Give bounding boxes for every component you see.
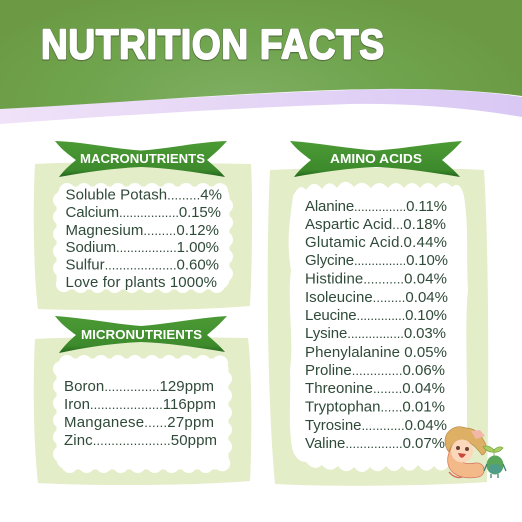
micronutrients list: Iron....................116ppm [64,396,216,413]
micronutrients card background [34,337,251,485]
amino acids list: Isoleucine.........0.04% [305,289,448,306]
micronutrients scalloped white area [61,363,224,465]
amino acids list: Alanine...............0.11% [305,198,447,215]
macronutrients list: Sulfur....................0.60% [66,256,219,274]
panel: macronutrients [34,141,252,310]
amino acids list: Glycine...............0.10% [305,252,448,269]
icon: seedling mascot [483,446,506,478]
panel: micronutrients [34,316,251,485]
amino acids list: Phenylalanine 0.05% [305,344,447,361]
micronutrients heading: MICRONUTRIENTS [81,327,202,342]
micronutrients list: Boron...............129ppm [64,378,214,395]
micronutrients ribbon [55,316,227,353]
amino acids white area [289,182,468,472]
panel: amino acids [268,141,488,486]
amino acids list: Tryptophan......0.01% [305,398,445,416]
macronutrients list: Sodium.................1.00% [66,239,219,256]
amino acids ribbon [290,141,462,177]
amino acids list: Leucine..............0.10% [305,307,447,324]
macronutrients list: Love for plants 1000% [66,274,217,291]
macronutrients ribbon [55,141,227,177]
icon: worm mascot with hat [445,427,486,477]
micronutrients list: Manganese......27ppm [64,414,214,431]
amino acids list: Threonine........0.04% [305,380,445,397]
amino acids list: Histidine...........0.04% [305,270,447,288]
amino acids heading: AMINO ACIDS [330,151,422,166]
amino acids list: Aspartic Acid...0.18% [305,216,446,233]
amino acids list: Lysine................0.03% [305,325,446,342]
macronutrients card background [34,162,252,310]
macronutrients heading: MACRONUTRIENTS [80,151,205,166]
amino acids list [305,198,448,452]
amino acids list: Proline..............0.06% [305,362,445,379]
micronutrients list: Zinc.....................50ppm [64,432,217,449]
macronutrients scalloped white area [61,191,225,285]
macronutrients list: Magnesium.........0.12% [66,222,219,239]
amino acids list: Valine................0.07% [305,435,445,452]
header wave band [0,0,522,124]
macronutrients list: Soluble Potash.........4% [66,186,222,204]
title: NUTRITION FACTS [41,21,384,68]
amino acids list: Glutamic Acid.0.44% [305,234,447,251]
amino acids list: Tyrosine............0.04% [305,417,447,434]
micronutrients list [64,378,217,449]
title: NUTRITION FACTS [41,22,384,69]
macronutrients list: Calcium.................0.15% [66,204,221,221]
amino acids card background [268,168,488,486]
macronutrients list [66,186,222,291]
